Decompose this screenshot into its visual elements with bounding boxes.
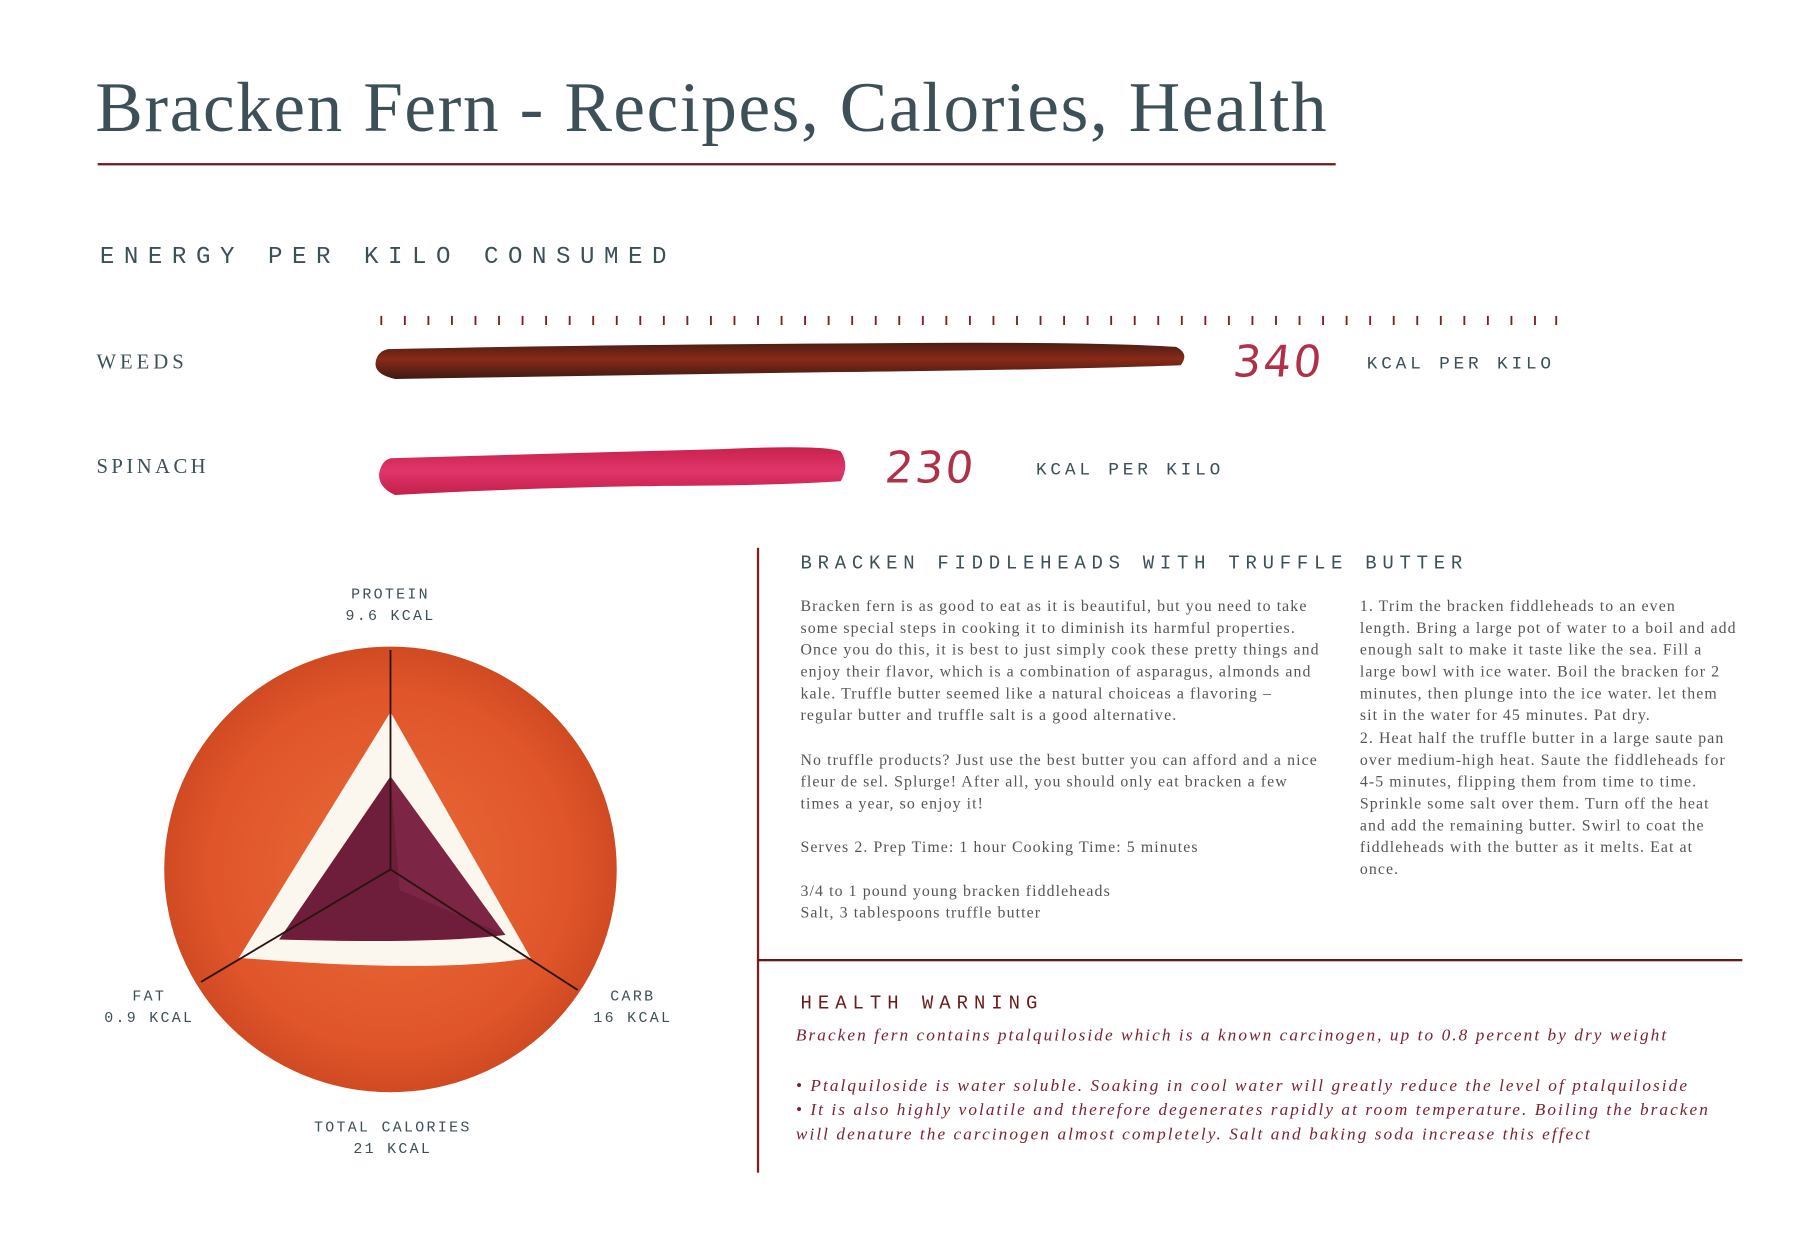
bar: spinach: [379, 447, 846, 495]
recipe steps column: minutes, then plunge into the ice water. let them: [1360, 685, 1718, 702]
text: will denature the carcinogen almost completely. Salt and baking soda increase this effect: [796, 1126, 1592, 1144]
bar: weeds: [376, 342, 1184, 379]
value: 340: 340: [1231, 337, 1326, 387]
recipe steps column: length. Bring a large pot of water to a boil and add: [1360, 619, 1737, 636]
recipe intro column: Once you do this, it is best to just simply cook these pretty things and: [801, 641, 1320, 658]
recipe intro column: Salt, 3 tablespoons truffle butter: [801, 904, 1041, 921]
recipe intro column: Bracken fern is as good to eat as it is beautiful, but you need to take: [801, 597, 1307, 614]
unit: weeds: KCAL PER KILO: [1367, 354, 1555, 374]
label: protein: PROTEIN: [351, 586, 430, 603]
label: fat: 0.9 KCAL: [104, 1010, 194, 1027]
health warning heading: HEALTH WARNING: [801, 992, 1043, 1014]
white triangle: [239, 712, 531, 966]
text: Bracken fern contains ptalquiloside which is a known carcinogen, up to 0.8 percent by dry weight: [796, 1027, 1668, 1045]
recipe intro column: kale. Truffle butter seemed like a natural choiceas a flavoring –: [801, 685, 1272, 702]
inner triangle: [279, 776, 505, 941]
label: carb: CARB: [610, 988, 655, 1005]
chart: calorie breakdown: [164, 646, 617, 1092]
recipe steps column: once.: [1360, 860, 1399, 878]
label: total calories: 21 KCAL: [353, 1140, 432, 1158]
label: spinach: SPINACH: [96, 455, 209, 478]
circle: [164, 647, 617, 1092]
label: fat: FAT: [132, 988, 166, 1005]
unit: spinach: KCAL PER KILO: [1036, 459, 1224, 480]
recipe steps column: 4-5 minutes, flipping them from time to time.: [1360, 773, 1697, 790]
recipe intro column: No truffle products? Just use the best butter you can afford and a nice: [801, 751, 1318, 768]
section heading: energy: ENERGY PER KILO CONSUMED: [100, 245, 676, 271]
recipe steps column: sit in the water for 45 minutes. Pat dry.: [1360, 707, 1651, 724]
axis lines: [201, 650, 578, 990]
vertical divider: [757, 548, 759, 1173]
recipe intro column: regular butter and truffle salt is a good alternative.: [801, 707, 1177, 724]
recipe heading: BRACKEN FIDDLEHEADS WITH TRUFFLE BUTTER: [801, 552, 1468, 574]
recipe steps column: 2. Heat half the truffle butter in a large saute pan: [1360, 729, 1724, 746]
recipe steps column: enough salt to make it taste like the sea. Fill a: [1360, 641, 1702, 658]
text: • It is also highly volatile and therefore degenerates rapidly at room temperature. Boiling the bracken: [796, 1101, 1710, 1120]
recipe steps column: 1. Trim the bracken fiddleheads to an even: [1360, 597, 1676, 614]
recipe intro column: enjoy their flavor, which is a combination of asparagus, almonds and: [801, 663, 1311, 680]
recipe steps column: large bowl with ice water. Boil the bracken for 2: [1360, 663, 1720, 680]
label: carb: 16 KCAL: [593, 1010, 672, 1027]
recipe intro column: Serves 2. Prep Time: 1 hour Cooking Time: 5 minutes: [801, 838, 1199, 856]
scale ticks: [380, 316, 1558, 325]
title underline: [98, 163, 1336, 165]
recipe steps column: Sprinkle some salt over them. Turn off the heat: [1360, 795, 1710, 812]
recipe steps column: fiddleheads with the butter as it melts. Eat at: [1360, 838, 1693, 856]
title: Bracken Fern - Recipes, Calories, Health: [95, 69, 1328, 147]
value: 230: 230: [883, 442, 978, 493]
recipe intro column: [800, 597, 1320, 921]
recipe steps column: and add the remaining butter. Swirl to coat the: [1360, 817, 1705, 834]
text: • Ptalquiloside is water soluble. Soaking in cool water will greatly reduce the level of ptalquiloside: [796, 1077, 1689, 1096]
recipe steps column: over medium-high heat. Saute the fiddleheads for: [1360, 751, 1726, 768]
label: protein: 9.6 KCAL: [345, 608, 436, 625]
label: protein: [345, 586, 436, 625]
recipe intro column: times a year, so enjoy it!: [801, 795, 984, 812]
label: fat: [104, 988, 194, 1027]
label: total calories: TOTAL CALORIES: [314, 1119, 472, 1136]
horizontal divider: [758, 959, 1742, 961]
health warning text: [796, 1027, 1710, 1144]
label: weeds: WEEDS: [96, 350, 188, 373]
recipe intro column: fleur de sel. Splurge! After all, you should only eat bracken a few: [801, 773, 1288, 790]
recipe intro column: some special steps in cooking it to diminish its harmful properties.: [801, 619, 1296, 636]
recipe intro column: 3/4 to 1 pound young bracken fiddleheads: [801, 882, 1111, 900]
label: carb: [593, 988, 672, 1027]
label: total calories: [314, 1119, 472, 1158]
recipe steps column: [1360, 597, 1737, 878]
